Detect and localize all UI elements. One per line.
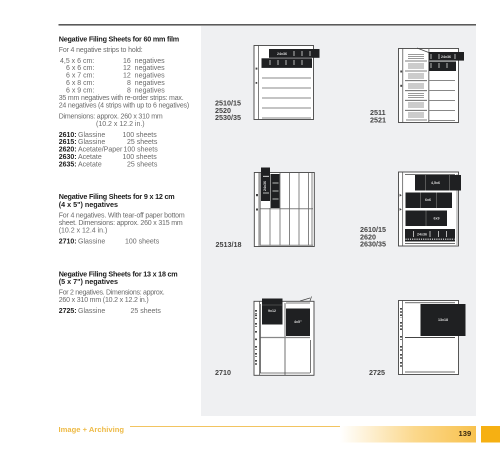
order line: 2710: 100 sheets (125, 238, 160, 246)
negative counts table: 12 negatives (123, 65, 165, 72)
orange tab (481, 426, 500, 442)
sheet icon: 2610 series (398, 172, 461, 246)
heading: 60 mm film: Negative Filing Sheets for 60 mm film (59, 34, 179, 44)
order list: 60 mm film: 2630: (59, 154, 77, 161)
negative counts table: 16 negatives (123, 58, 165, 65)
description: 13 x 18 cm: 260 x 310 mm (10.2 x 12.2 in.) (59, 297, 149, 304)
sheet icon: 2725: 13x18 (438, 318, 448, 322)
film strip: 6x6: 6x6 (425, 198, 431, 202)
sheet icon: 2513/18 (254, 168, 314, 246)
top rule (58, 24, 476, 26)
film strip: 4.5x6: 4,5x6 (431, 181, 440, 185)
product labels: 2510 series (215, 98, 241, 122)
heading: 13 x 18 cm: Negative Filing Sheets for 13 x 18 cm (59, 269, 178, 278)
order list: 60 mm film: 2615: (59, 139, 77, 146)
description: 13 x 18 cm (59, 290, 165, 304)
negative counts table: 8 negatives (127, 80, 165, 87)
product labels: 2610 series: 2610/15 (360, 225, 386, 234)
sheet icon: 2510 series: 24x36 (277, 52, 287, 56)
dimensions: 60 mm film (59, 114, 163, 128)
description: 9 x 12 cm: (10.2 x 12.4 in.) (59, 227, 107, 234)
order line: 2710: 2710: (59, 238, 77, 246)
sheet icon: 2511 series: 24x36 (441, 55, 451, 59)
order list: 60 mm film: 25 sheets (127, 161, 158, 168)
order list: 60 mm film: Glassine (78, 139, 105, 146)
product labels: 2510 series: 2520 (215, 106, 231, 115)
order list: 60 mm film: 2610: (59, 132, 77, 139)
description: 9 x 12 cm (59, 213, 185, 234)
footer rule (130, 425, 476, 428)
footer title: Image + Archiving (58, 425, 124, 434)
dimensions: 60 mm film: (10.2 x 12.2 in.) (96, 121, 145, 128)
intro: 60 mm film: For 4 negative strips to hold: (59, 47, 143, 54)
sheet icon: 2710 (254, 296, 314, 375)
footer gradient band (340, 426, 476, 442)
heading: 9 x 12 cm: (4 x 5") negatives (59, 200, 118, 209)
order line: 2725: Glassine (78, 308, 105, 315)
product label: 2725: 2725 (369, 368, 385, 377)
heading: 9 x 12 cm (59, 192, 175, 209)
negative counts table: 6 x 9 cm: (66, 87, 94, 94)
negative counts table: 12 negatives (123, 73, 165, 80)
order list: 60 mm film: Acetate/Paper (78, 147, 123, 154)
panel: grey product background (201, 26, 476, 416)
sheet icon: 2710: 9x12 (268, 309, 276, 313)
negative counts table: 6 x 6 cm: (66, 65, 94, 72)
dimensions: 60 mm film: Dimensions: approx. 260 x 310 mm (59, 114, 163, 120)
heading: 13 x 18 cm: (5 x 7") negatives (59, 277, 118, 286)
order line: 2725: 2725: (59, 308, 77, 315)
sheet icon: 2510 series (254, 46, 320, 120)
text block: 60 mm film (59, 34, 189, 168)
film strip: 24x36: 24x36 (417, 232, 427, 236)
product label: 2710: 2710 (215, 368, 231, 377)
description: 9 x 12 cm: For 4 negatives. With tear-off paper bottom (59, 213, 185, 220)
sheet icon: 2725 (398, 300, 466, 374)
product labels: 2511 series (370, 108, 386, 124)
negative counts table: 6 x 8 cm: (66, 80, 94, 87)
order list: 60 mm film: 100 sheets (124, 147, 158, 154)
negative counts table (60, 58, 165, 94)
page number: 139 (458, 429, 471, 438)
product labels: 2510 series: 2530/35 (215, 113, 241, 122)
order list: 60 mm film: Acetate (78, 161, 102, 168)
negative counts table: 4,5 x 6 cm: (60, 58, 94, 65)
order list: 60 mm film: 100 sheets (122, 154, 157, 161)
order list: 60 mm film: 100 sheets (122, 132, 157, 139)
film strip: 6x9: 6x9 (434, 216, 440, 220)
order list: 60 mm film: 25 sheets (127, 139, 158, 146)
product labels: 2610 series: 2630/35 (360, 240, 386, 249)
product labels: 2510 series: 2510/15 (215, 98, 241, 108)
sheet icon: 2513/18: 24x36 (263, 181, 267, 191)
product labels: 2610 series (360, 225, 386, 249)
order list: 60 mm film: Glassine (78, 132, 105, 139)
description: 13 x 18 cm: For 2 negatives. Dimensions: approx. (59, 290, 165, 297)
negative counts table: 6 x 7 cm: (66, 73, 94, 80)
note: 35 mm negatives: 24 negatives (4 strips with up to 6 negatives) (59, 102, 189, 109)
heading: 9 x 12 cm: Negative Filing Sheets for 9 x 12 cm (59, 192, 175, 201)
sheet icon: 2710: 4x5" (294, 320, 302, 324)
product label: 2513/18: 2513/18 (216, 240, 241, 249)
order list: 60 mm film: Acetate (78, 154, 102, 161)
footer (58, 425, 500, 442)
order list: 60 mm film: 2635: (59, 161, 77, 168)
order line: 2710 (59, 238, 160, 246)
product labels: 2610 series: 2620 (360, 232, 376, 241)
order line: 2725 (59, 308, 161, 315)
note: 35 mm negatives: 35 mm negatives with re-order strips: max. (59, 95, 184, 102)
text block: 13 x 18 cm (59, 269, 178, 315)
order list: 60 mm film: 2620: (59, 147, 77, 154)
heading: 13 x 18 cm (59, 269, 178, 286)
order list: 60 mm film (59, 132, 158, 168)
sheet icon: 2511 series (398, 48, 464, 122)
note: 35 mm negatives (59, 95, 189, 109)
product labels: 2511 series: 2521 (370, 115, 386, 124)
order line: 2725: 25 sheets (130, 308, 161, 315)
description: 9 x 12 cm: sheet. Dimensions: approx. 260 x 315 mm (59, 220, 183, 227)
product labels: 2511 series: 2511 (370, 108, 386, 117)
negative counts table: 8 negatives (127, 87, 165, 94)
text block: 9 x 12 cm (59, 192, 185, 246)
order line: 2710: Glassine (78, 238, 105, 246)
